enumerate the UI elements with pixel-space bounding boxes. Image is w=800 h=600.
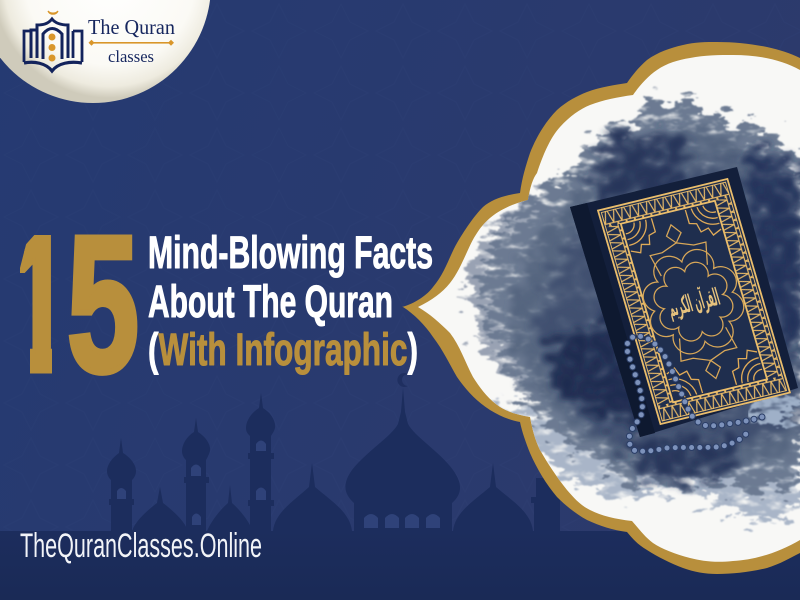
website url: TheQuranClasses.Online — [20, 527, 262, 565]
central medallion — [625, 214, 762, 390]
crescent above main dome — [397, 373, 408, 387]
ink: pale left wash — [465, 190, 560, 400]
corner arcs — [623, 203, 765, 400]
badge circle — [0, 0, 211, 103]
panel fill — [597, 178, 791, 425]
big number 15 — [20, 234, 138, 376]
minaret 1 — [107, 438, 136, 531]
icon: gold beads — [48, 34, 56, 62]
logo text: The Quran: The Quran — [88, 15, 175, 39]
quran book — [570, 167, 798, 437]
ink wash panel — [418, 55, 800, 562]
ink: dark right patch — [745, 150, 800, 360]
ink: pale lower wash — [490, 400, 800, 520]
book cover — [570, 167, 798, 437]
book cover ornament — [597, 178, 791, 425]
ink: slate wash — [530, 160, 800, 450]
title — [148, 227, 433, 375]
logo badge — [0, 0, 211, 103]
ink: dark top patch — [595, 130, 685, 205]
logo text: classes: classes — [108, 47, 154, 66]
side domes — [273, 463, 352, 531]
ink: pale streak — [755, 395, 800, 425]
title line 3: (With Infographic) — [148, 324, 418, 375]
book spine — [570, 203, 655, 437]
title line 1: Mind-Blowing Facts — [148, 227, 433, 278]
bottom dark band — [0, 531, 800, 600]
big number 15: 1 — [8, 196, 70, 413]
minaret right of mosque — [531, 478, 560, 531]
mosque silhouette — [107, 373, 560, 531]
minaret windows — [117, 440, 440, 528]
ornate gold frame — [402, 42, 800, 574]
title line 2: About The Quran — [148, 276, 393, 327]
main dome — [345, 388, 460, 531]
ink: mid tone base — [510, 125, 800, 470]
minaret 3 — [246, 393, 275, 531]
ink: mid tone wash — [480, 100, 800, 500]
ink: dark left patch — [550, 310, 650, 420]
logo divider — [88, 40, 174, 46]
icon: mosque book logo — [24, 11, 82, 71]
gold border lines — [598, 179, 790, 424]
zigzag border band — [601, 182, 787, 421]
panel background — [418, 55, 800, 562]
minaret 2 — [182, 418, 210, 531]
prayer beads — [627, 336, 762, 451]
ink: dark lower patch — [620, 435, 740, 485]
big number 15: 5 — [67, 196, 139, 413]
